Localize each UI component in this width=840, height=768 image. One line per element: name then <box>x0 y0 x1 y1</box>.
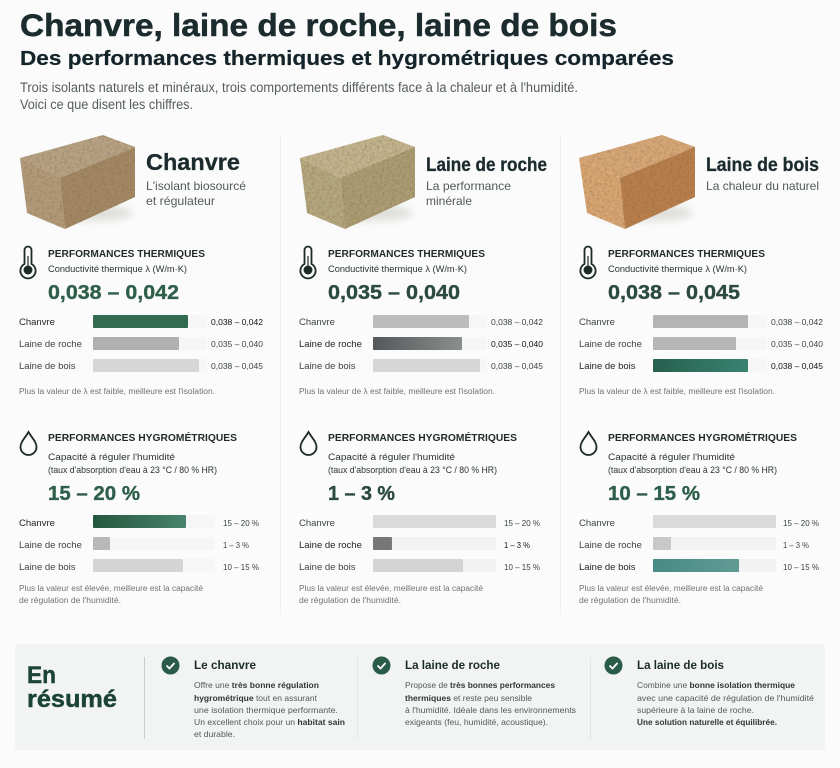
summary: la laine de bois: Combine une bonne isolation thermique <box>637 680 795 690</box>
tagline: chanvre: et régulateur <box>146 194 215 208</box>
bar chart: thermique <box>579 315 823 372</box>
bar chart: thermique: Laine de roche <box>579 339 642 350</box>
bar chart: hygrometrique: Laine de bois <box>299 562 356 573</box>
panel: laine de bois <box>579 135 823 605</box>
bar chart: thermique: 0,035 – 0,040 <box>211 339 263 349</box>
bar chart: thermique: 0,038 – 0,045 <box>771 361 823 371</box>
bar chart: hygrometrique: Laine de bois <box>19 562 76 573</box>
title: Chanvre, laine de roche, laine de bois <box>20 7 617 43</box>
bar chart: thermique: Chanvre <box>19 317 55 328</box>
image: laine de roche block <box>300 135 415 229</box>
tagline: chanvre <box>146 179 246 208</box>
panel: laine de roche <box>299 135 547 605</box>
bar chart: hygrometrique: 1 – 3 % <box>783 540 809 550</box>
intro text: Voici ce que disent les chiffres. <box>20 97 193 112</box>
heading: en résumé <box>27 662 117 713</box>
metric label: Conductivité thermique λ (W/m·K) <box>328 264 467 274</box>
bar chart: hygrometrique: Laine de roche <box>579 540 642 551</box>
bar chart: hygrometrique: Chanvre <box>579 518 615 529</box>
summary: la laine de bois: avec une capacité de régulation de l'humidité <box>637 693 814 703</box>
bar chart: thermique: 0,038 – 0,042 <box>491 317 543 327</box>
bar chart: hygrometrique: Laine de roche <box>299 540 362 551</box>
heading: performances hygrometriques: PERFORMANCES HYGROMÉTRIQUES <box>328 431 517 444</box>
bar chart: thermique: 0,035 – 0,040 <box>771 339 823 349</box>
heading: performances thermiques: PERFORMANCES THERMIQUES <box>608 248 765 260</box>
intro text: Trois isolants naturels et minéraux, trois comportements différents face à la chaleur et à l'humidité. <box>20 80 578 95</box>
icon: water drop <box>580 432 596 455</box>
bar chart: hygrometrique: 15 – 20 % <box>223 518 259 528</box>
bar chart: thermique: Chanvre <box>299 317 335 328</box>
metric label: Capacité à réguler l'humidité <box>48 452 175 462</box>
summary: la laine de bois: supérieure à la laine de roche. <box>637 705 754 715</box>
bar chart: thermique: Chanvre <box>579 317 615 328</box>
footnote: de régulation de l'humidité. <box>579 596 681 605</box>
bar chart: thermique: Laine de roche <box>19 339 82 350</box>
heading: performances thermiques: PERFORMANCES THERMIQUES <box>328 248 485 260</box>
summary: le chanvre: hygrométrique tout en assurant <box>194 693 318 703</box>
footnote: de régulation de l'humidité. <box>299 596 401 605</box>
panel: chanvre <box>19 135 263 605</box>
summary: la laine de bois: La laine de bois <box>637 658 724 672</box>
bar chart: hygrometrique: 10 – 15 % <box>223 562 259 572</box>
summary: le chanvre: Le chanvre <box>194 658 256 672</box>
footnote: Plus la valeur de λ est faible, meilleure est l'isolation. <box>19 387 215 396</box>
metric label: (taux d'absorption d'eau à 23 °C / 80 % HR) <box>608 465 777 475</box>
bar chart: hygrometrique: 10 – 15 % <box>783 562 819 572</box>
heading: performances hygrometriques: PERFORMANCES HYGROMÉTRIQUES <box>608 431 797 444</box>
image: chanvre block <box>20 135 135 229</box>
icon: thermometer <box>300 246 316 278</box>
icon: check laine de bois <box>604 656 622 674</box>
bar chart: thermique: Laine de bois <box>579 361 636 372</box>
bar chart: hygrometrique: 1 – 3 % <box>223 540 249 550</box>
key value: 1 – 3 % <box>328 482 395 505</box>
metric label <box>608 452 777 475</box>
icon: water drop <box>20 432 36 455</box>
bar chart: thermique <box>299 315 543 372</box>
summary: la laine de roche: exigeants (feu, humidité, acoustique). <box>405 717 548 727</box>
footnote: de régulation de l'humidité. <box>19 596 121 605</box>
metric label: Capacité à réguler l'humidité <box>608 452 735 462</box>
key value: 10 – 15 % <box>608 482 700 505</box>
bar chart: thermique <box>19 315 263 372</box>
bar chart: thermique: Laine de bois <box>19 361 76 372</box>
icon: check chanvre <box>162 656 180 674</box>
metric label <box>328 452 497 475</box>
summary: le chanvre: Un excellent choix pour un habitat sain <box>194 717 345 727</box>
tagline: laine de roche <box>426 179 511 208</box>
metric label: (taux d'absorption d'eau à 23 °C / 80 % HR) <box>328 465 497 475</box>
key value: 0,038 – 0,045 <box>608 281 740 304</box>
metric label <box>48 452 217 475</box>
bar chart: hygrometrique: Laine de roche <box>19 540 82 551</box>
bar chart: hygrometrique: 15 – 20 % <box>783 518 819 528</box>
key value: 0,035 – 0,040 <box>328 281 460 304</box>
heading: performances hygrometriques: PERFORMANCES HYGROMÉTRIQUES <box>48 431 237 444</box>
summary: la laine de roche: thermiques et reste peu sensible <box>405 693 532 703</box>
bar chart: hygrometrique <box>579 515 819 573</box>
summary: la laine de bois: Une solution naturelle et équilibrée. <box>637 717 777 727</box>
footnote: Plus la valeur est élevée, meilleure est la capacité <box>299 584 484 593</box>
summary: le chanvre: Offre une très bonne régulation <box>194 680 319 690</box>
bar chart: hygrometrique <box>299 515 540 573</box>
summary: la laine de bois <box>637 658 814 727</box>
bar chart: hygrometrique: Laine de bois <box>579 562 636 573</box>
footnote: Plus la valeur de λ est faible, meilleure est l'isolation. <box>579 387 775 396</box>
subtitle: Des performances thermiques et hygrométriques comparées <box>20 47 674 70</box>
metric label: Conductivité thermique λ (W/m·K) <box>608 264 747 274</box>
bar chart: thermique: 0,038 – 0,045 <box>491 361 543 371</box>
icon: water drop <box>300 432 316 455</box>
heading: performances thermiques: PERFORMANCES THERMIQUES <box>48 248 205 260</box>
summary: la laine de roche: à l'humidité. Idéale dans les environnements <box>405 705 576 715</box>
key value: 0,038 – 0,042 <box>48 281 179 304</box>
summary: le chanvre: une isolation thermique performante. <box>194 705 338 715</box>
metric label: (taux d'absorption d'eau à 23 °C / 80 % HR) <box>48 465 217 475</box>
bar chart: hygrometrique: Chanvre <box>19 518 55 529</box>
bar chart: thermique: 0,038 – 0,045 <box>211 361 263 371</box>
bar chart: hygrometrique: 15 – 20 % <box>504 518 540 528</box>
bar chart: thermique: Laine de roche <box>299 339 362 350</box>
footnote: Plus la valeur de λ est faible, meilleure est l'isolation. <box>299 387 495 396</box>
footnote <box>19 584 204 605</box>
bar chart: thermique: 0,035 – 0,040 <box>491 339 543 349</box>
bar chart: hygrometrique: 1 – 3 % <box>504 540 530 550</box>
bar chart: hygrometrique <box>19 515 259 573</box>
heading: en résumé: En <box>27 662 56 689</box>
key value: 15 – 20 % <box>48 482 140 505</box>
bar chart: thermique: Laine de bois <box>299 361 356 372</box>
bar chart: hygrometrique: Chanvre <box>299 518 335 529</box>
bar chart: hygrometrique: 10 – 15 % <box>504 562 540 572</box>
summary: le chanvre: et durable. <box>194 729 235 739</box>
footnote <box>299 584 484 605</box>
tagline: laine de roche: La performance <box>426 179 511 193</box>
tagline: laine de roche: minérale <box>426 194 472 208</box>
icon: thermometer <box>580 246 596 278</box>
summary: la laine de roche: Propose de très bonnes performances <box>405 680 555 690</box>
heading: en résumé: résumé <box>27 686 117 713</box>
tagline: laine de bois: La chaleur du naturel <box>706 179 819 193</box>
footnote <box>579 584 764 605</box>
bar chart: thermique: 0,038 – 0,042 <box>771 317 823 327</box>
icon: thermometer <box>20 247 36 278</box>
summary: la laine de roche: La laine de roche <box>405 658 500 672</box>
heading: chanvre: Chanvre <box>146 149 240 175</box>
metric label: Capacité à réguler l'humidité <box>328 452 455 462</box>
footnote: Plus la valeur est élevée, meilleure est la capacité <box>19 584 204 593</box>
heading: laine de bois: Laine de bois <box>706 154 819 176</box>
footnote: Plus la valeur est élevée, meilleure est la capacité <box>579 584 764 593</box>
summary: la laine de roche <box>405 658 576 727</box>
heading: laine de roche: Laine de roche <box>426 154 547 176</box>
metric label: Conductivité thermique λ (W/m·K) <box>48 264 187 274</box>
tagline: chanvre: L'isolant biosourcé <box>146 179 246 193</box>
panel: en résumé <box>15 644 825 750</box>
bar chart: thermique: 0,038 – 0,042 <box>211 317 263 327</box>
icon: check laine de roche <box>372 656 390 674</box>
summary: le chanvre <box>194 658 345 739</box>
intro text <box>20 80 578 112</box>
image: laine de bois block <box>579 135 695 229</box>
